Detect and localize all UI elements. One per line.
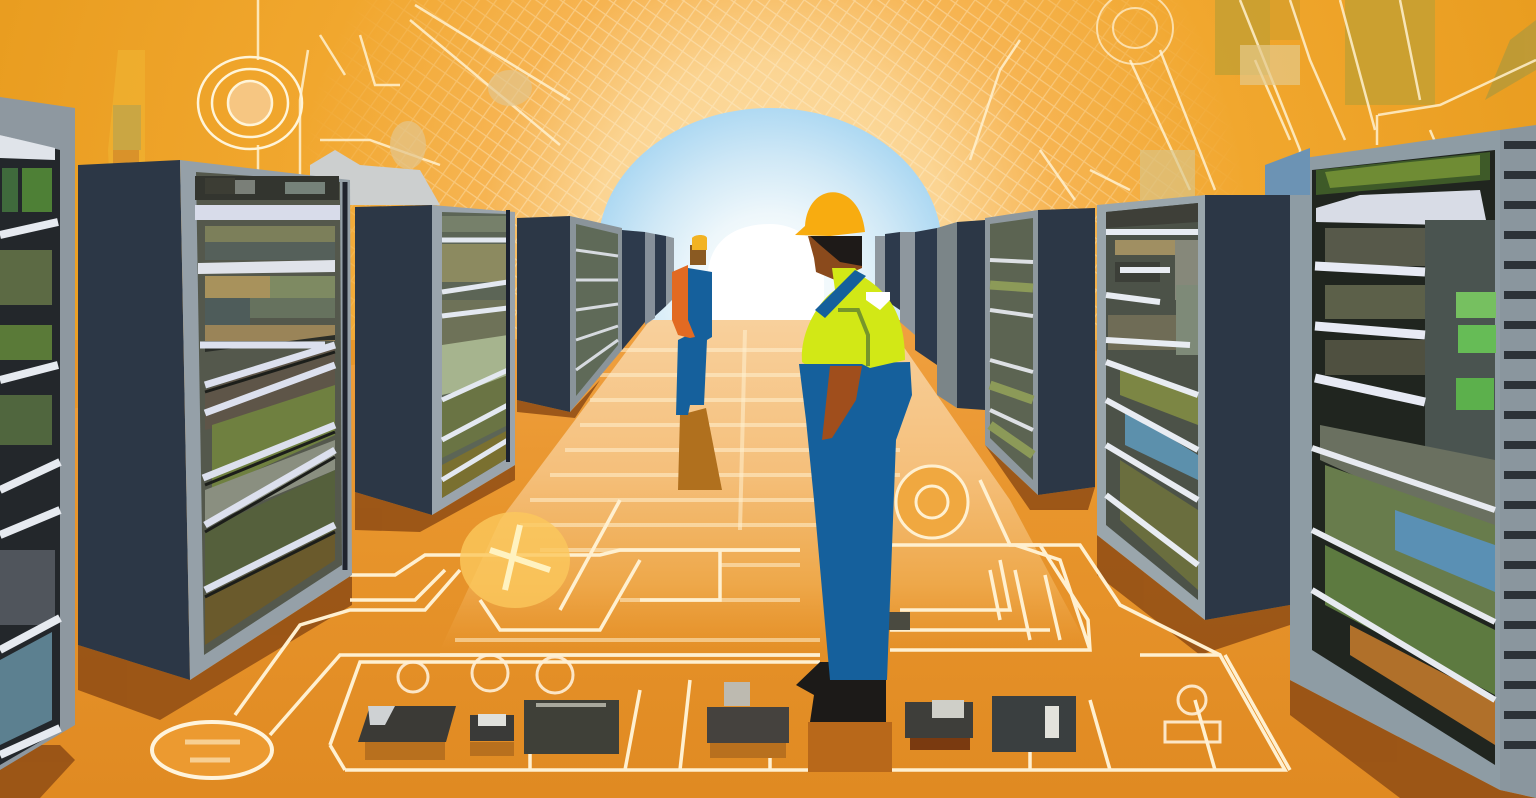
floor glow spot xyxy=(460,512,570,608)
rack left 3 xyxy=(517,216,622,412)
rack right 3 xyxy=(937,220,985,410)
wall circuit lines, right xyxy=(970,0,1536,200)
wall circle motif xyxy=(198,57,302,149)
floor stripes xyxy=(440,330,900,655)
boots xyxy=(796,662,886,722)
far right racks xyxy=(875,228,937,365)
worker helmet xyxy=(692,235,707,250)
worker legs and bib xyxy=(676,268,712,415)
rack left 0 xyxy=(0,97,75,770)
neck and face xyxy=(808,236,862,280)
wall hatch texture xyxy=(324,0,1222,330)
small distant worker xyxy=(672,235,722,490)
wall map patches xyxy=(108,45,1300,235)
rack left 1 xyxy=(78,160,352,680)
far left racks xyxy=(622,230,674,350)
shirt logo xyxy=(866,292,890,310)
worker shadow xyxy=(678,408,722,490)
rack right 1 xyxy=(1097,195,1290,620)
floor traces xyxy=(235,480,1290,770)
wall circle motif, top right xyxy=(1097,0,1173,64)
central floor glow xyxy=(440,320,1090,650)
hair shade xyxy=(810,236,862,266)
floor shadows xyxy=(0,380,1536,798)
boot shadow xyxy=(808,722,892,772)
shirt seam xyxy=(838,310,868,366)
bottom-left network node xyxy=(152,722,272,778)
arm xyxy=(822,366,862,440)
small floor icons xyxy=(398,655,1220,742)
helmet xyxy=(795,192,865,236)
rack right 0 xyxy=(1265,125,1536,798)
rack left 2 xyxy=(355,205,515,515)
floor gear icon xyxy=(896,466,968,538)
background wall xyxy=(0,0,1536,340)
overalls xyxy=(799,362,912,680)
overall strap xyxy=(815,270,866,318)
worker face xyxy=(690,245,706,265)
wall circuit lines, left xyxy=(258,0,570,185)
worker arm xyxy=(672,265,695,338)
floor xyxy=(0,320,1536,798)
main worker xyxy=(795,192,912,772)
rack right 2 xyxy=(985,208,1095,495)
shirt xyxy=(802,268,905,368)
olive map columns, top right xyxy=(1215,0,1536,105)
floor chips xyxy=(358,612,1076,760)
sky opening xyxy=(598,108,942,388)
